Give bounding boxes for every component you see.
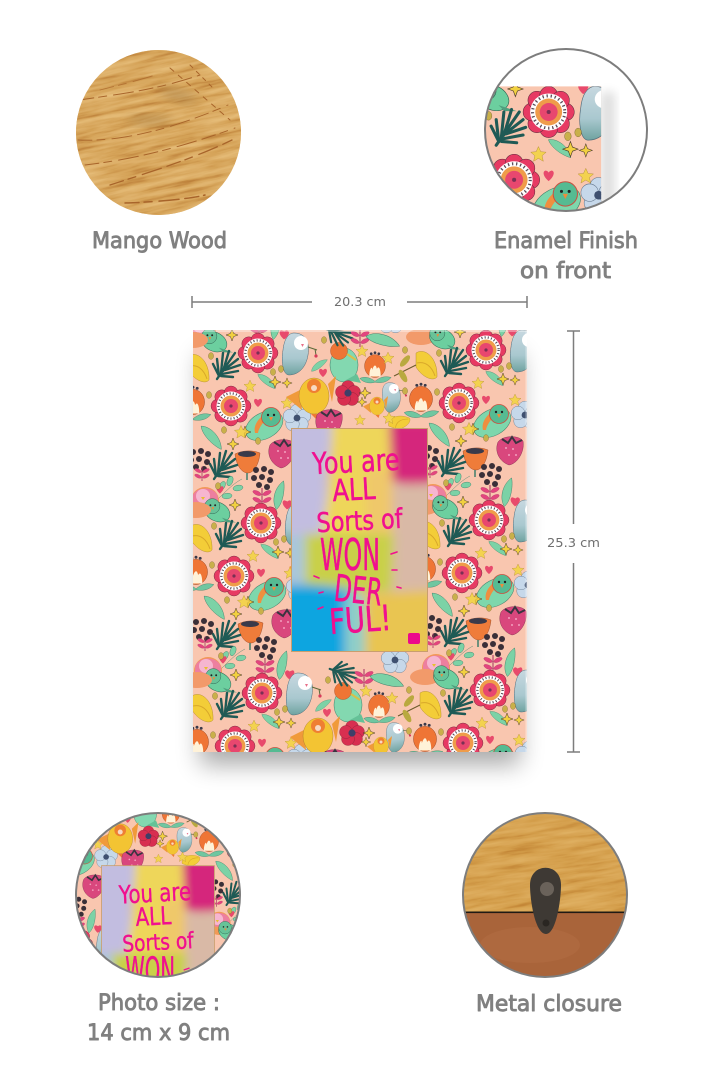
height dimension: 25.3 cm: 25.3 cm (547, 535, 600, 550)
circle outline: photo size (76, 813, 240, 977)
icon: back of frame with clasp (464, 814, 626, 976)
panel: enamel finish swatch (484, 48, 648, 279)
frame drop shadow (200, 355, 520, 765)
label: Metal closure: Metal closure (476, 992, 622, 1017)
circle outline: closure (463, 813, 627, 977)
label: Photo size (87, 991, 230, 1046)
height dimension: 25.3 cm (547, 331, 600, 752)
label: Mango Wood: Mango Wood (92, 229, 227, 254)
icon: zoomed frame corner circle (486, 86, 618, 210)
main product: patterned photo frame (193, 330, 527, 752)
label: Photo size: 14 cm x 9 cm (87, 1021, 230, 1046)
icon: wood grain circle (76, 50, 241, 215)
circle outline: enamel (485, 49, 647, 211)
label: Enamel Finish on front: Enamel Finish (494, 229, 638, 254)
panel: metal closure swatch (462, 812, 628, 1012)
width dimension: 20.3 cm: 20.3 cm (334, 294, 386, 309)
icon: zoomed frame window circle (75, 814, 241, 976)
panel: photo size swatch (75, 812, 241, 1041)
panel: mango wood swatch (76, 50, 241, 253)
label: Photo size: Photo size : (98, 991, 220, 1016)
width dimension: 20.3 cm (192, 294, 527, 309)
label: Enamel Finish on front (494, 229, 638, 284)
label: Enamel Finish on front: on front (520, 259, 611, 284)
